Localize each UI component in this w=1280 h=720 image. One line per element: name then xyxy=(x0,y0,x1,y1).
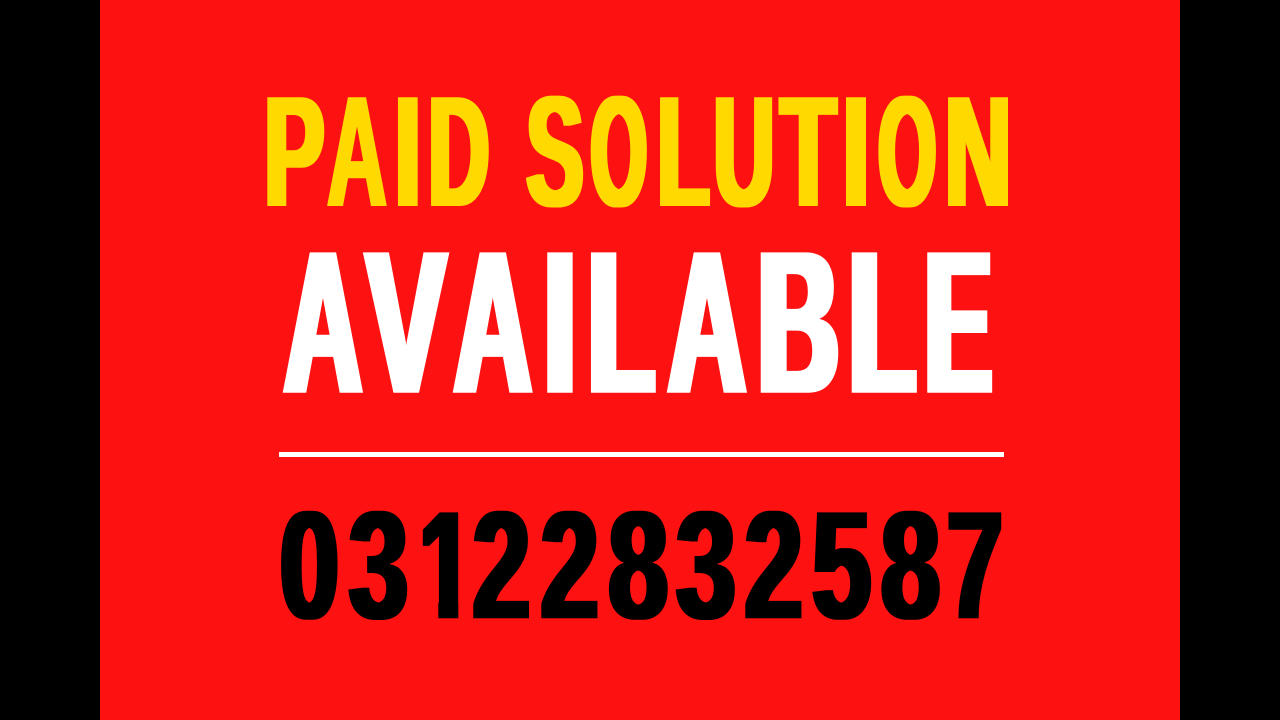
heading: available: B xyxy=(758,208,838,436)
phone number: 7 xyxy=(947,481,1003,652)
heading: available: I xyxy=(545,209,575,437)
heading: paid solution: N xyxy=(945,64,1011,240)
heading: paid solution: I xyxy=(395,63,421,240)
heading: paid solution: L xyxy=(657,63,710,240)
heading: available xyxy=(284,208,991,437)
phone number xyxy=(281,510,1002,620)
phone number: 1 xyxy=(419,480,473,652)
phone number: 2 xyxy=(745,479,803,651)
phone number: 3 xyxy=(349,480,408,652)
phone number: 2 xyxy=(541,479,599,651)
phone number: 0 xyxy=(280,480,339,652)
heading: available: A xyxy=(668,208,746,436)
phone number: 3 xyxy=(676,480,736,652)
phone number: 5 xyxy=(812,480,871,652)
heading: paid solution: P xyxy=(264,65,324,240)
heading: available: A xyxy=(284,208,362,436)
heading: available: A xyxy=(454,208,532,436)
heading: available: V xyxy=(366,209,446,437)
heading: paid solution: T xyxy=(780,64,836,240)
heading: available: L xyxy=(850,208,915,436)
heading: paid solution: A xyxy=(327,63,387,240)
heading: paid solution: O xyxy=(878,64,936,241)
heading: paid solution: D xyxy=(428,63,489,240)
heading: paid solution: S xyxy=(526,63,584,240)
heading: available: E xyxy=(926,208,991,436)
heading: paid solution: I xyxy=(842,63,870,240)
heading: paid solution: U xyxy=(714,62,774,240)
heading: paid solution: O xyxy=(591,65,647,241)
phone number: 8 xyxy=(881,480,940,652)
heading: available: L xyxy=(589,209,654,437)
divider line xyxy=(279,452,1004,457)
phone number: 2 xyxy=(473,479,530,651)
heading: paid solution xyxy=(264,62,1011,241)
phone number: 8 xyxy=(608,480,668,652)
